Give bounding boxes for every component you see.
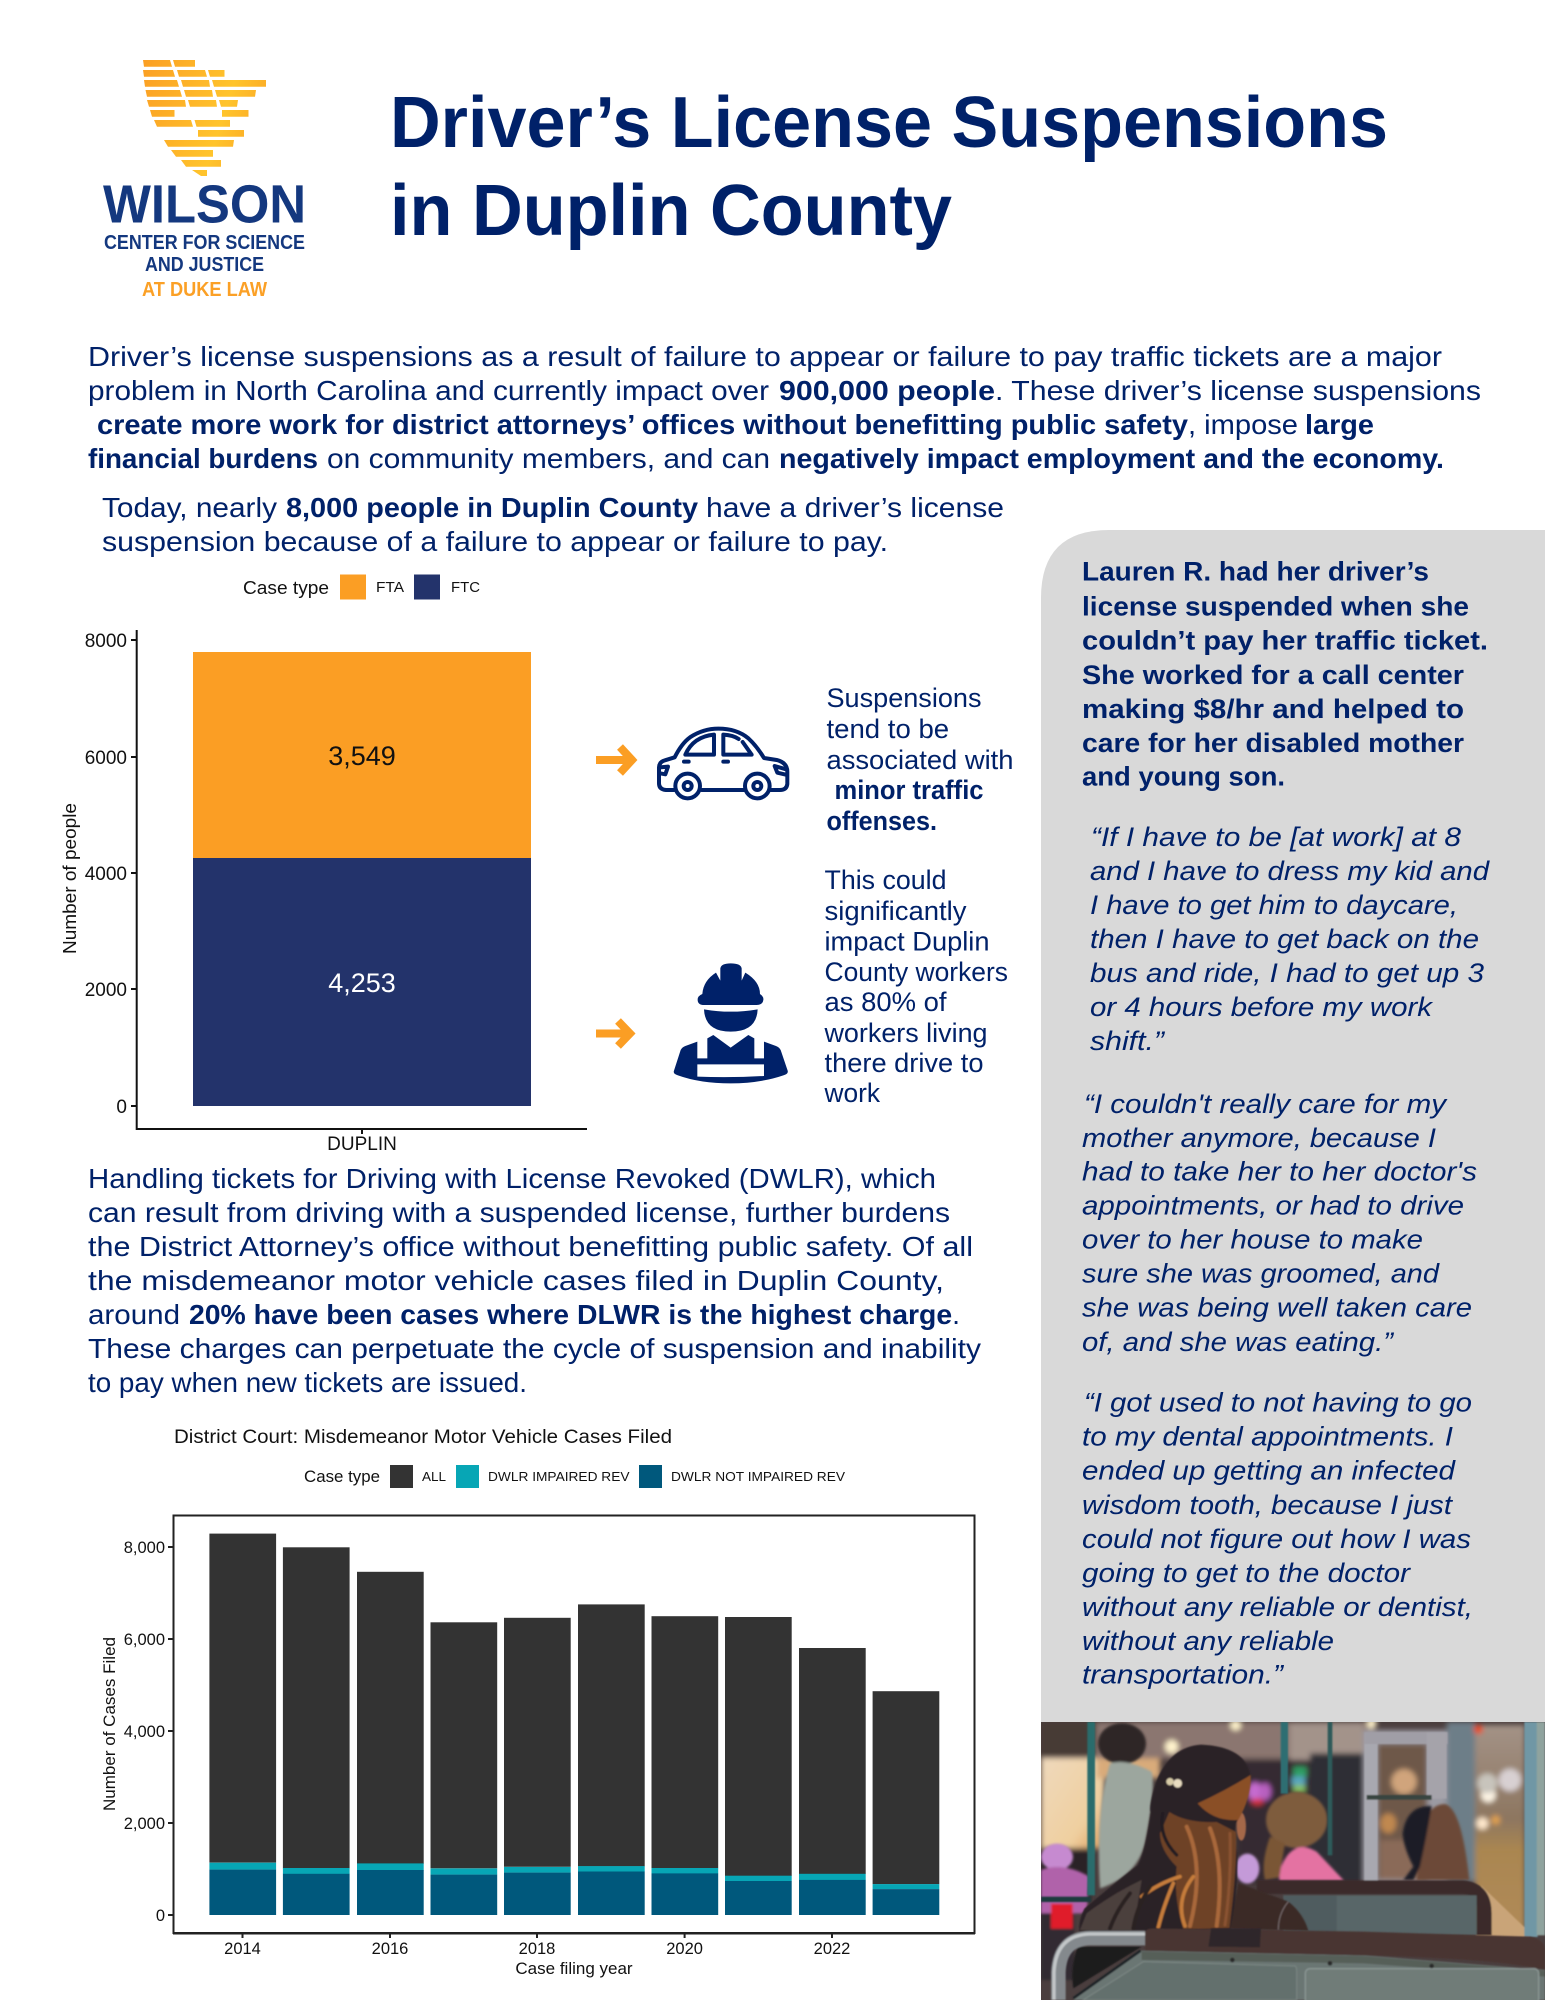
worker text	[824, 865, 1008, 1108]
logo wordmark	[103, 175, 306, 301]
quote 2: mother anymore, because I	[1082, 1123, 1437, 1153]
arrow to worker	[596, 1021, 630, 1046]
intro paragraph: create more work for district attorneys’ offices without benefitting public safety	[97, 409, 1188, 440]
x axis labels: 2020	[666, 1940, 703, 1958]
quote 1: I have to get him to daycare,	[1090, 890, 1458, 920]
y axis labels	[124, 1539, 165, 1925]
y axis labels: 8000	[85, 631, 127, 652]
intro paragraph: large	[1305, 409, 1374, 440]
quote 1: “If I have to be [at work] at 8	[1091, 822, 1461, 852]
y axis title: Number of Cases Filed	[100, 1637, 119, 1811]
DWLR paragraph: Handling tickets for Driving with License Revoked (DWLR), which	[88, 1163, 936, 1194]
worker text: This could	[824, 865, 946, 895]
DWLR not impaired bars	[209, 1870, 939, 1915]
car text	[826, 683, 1014, 836]
plot frame	[174, 1516, 974, 1933]
y axis labels: 4,000	[124, 1723, 165, 1741]
intro paragraph: 900,000 people	[779, 375, 995, 406]
legend: DWLR IMPAIRED REV	[488, 1469, 630, 1484]
story intro: and young son.	[1082, 762, 1285, 792]
story intro: Lauren R. had her driver’s	[1082, 556, 1429, 586]
logo mark	[143, 60, 266, 176]
quote 3: without any reliable or dentist,	[1082, 1592, 1473, 1622]
intro paragraph: problem in North Carolina and currently impact over	[88, 375, 769, 406]
x axis labels: 2022	[814, 1940, 850, 1958]
logo wordmark: AND JUSTICE	[145, 253, 264, 276]
y axis labels: 2000	[85, 980, 127, 1001]
logo: Wilson Center	[103, 60, 306, 301]
worker text: workers living	[824, 1018, 988, 1048]
quote 3: “I got used to not having to go	[1084, 1388, 1472, 1418]
x axis labels	[224, 1940, 850, 1958]
quote 3: wisdom tooth, because I just	[1082, 1490, 1454, 1520]
quote 2: over to her house to make	[1082, 1225, 1423, 1255]
quote 1: then I have to get back on the	[1090, 924, 1479, 954]
quote 1	[1090, 822, 1490, 1056]
quote 2: had to take her to her doctor's	[1082, 1156, 1477, 1186]
worker text: significantly	[824, 896, 967, 926]
quote 3: without any reliable	[1082, 1626, 1334, 1656]
title	[390, 83, 1388, 251]
DWLR paragraph: can result from driving with a suspended license, further burdens	[88, 1197, 950, 1228]
car text: tend to be	[826, 714, 949, 744]
intro paragraph: Driver’s license suspensions as a result of failure to appear or failure to pay traffic tickets are a major	[88, 341, 1442, 372]
title: Driver’s License Suspensions	[390, 83, 1388, 163]
Duplin County statement	[102, 492, 1004, 557]
DWLR paragraph: the District Attorney’s office without benefitting public safety. Of all	[88, 1231, 973, 1262]
FTC bar segment	[193, 858, 531, 1106]
quote 3: transportation.”	[1082, 1660, 1284, 1690]
intro paragraph: financial burdens	[88, 443, 318, 474]
front seat	[1054, 1928, 1545, 2000]
icon: car	[659, 729, 787, 798]
quote 1: shift.”	[1090, 1026, 1165, 1056]
FTA value: 3,549	[328, 741, 396, 771]
quote 3: could not figure out how I was	[1082, 1524, 1471, 1554]
y axis labels: 4000	[85, 864, 127, 885]
x axis labels: 2014	[224, 1940, 261, 1958]
intro paragraph: . These driver’s license suspensions	[995, 375, 1481, 406]
worker text: impact Duplin	[824, 926, 990, 956]
quote 2: sure she was groomed, and	[1082, 1259, 1440, 1289]
legend: FTA	[376, 579, 404, 596]
DWLR paragraph: around	[88, 1299, 180, 1330]
story intro: license suspended when she	[1082, 592, 1469, 622]
x axis labels: 2018	[519, 1940, 555, 1958]
x axis title: Case filing year	[515, 1959, 633, 1978]
quote 3: ended up getting an infected	[1082, 1456, 1456, 1486]
quote 2: “I couldn't really care for my	[1084, 1089, 1448, 1119]
panel background	[1041, 530, 1545, 1722]
y axis labels: 2,000	[124, 1815, 165, 1833]
y axis title: Number of people	[60, 803, 80, 954]
quote 3	[1082, 1388, 1473, 1690]
FTC value: 4,253	[328, 968, 396, 998]
DWLR paragraph	[88, 1163, 981, 1398]
bar chart: misdemeanor motor vehicle cases	[100, 1427, 975, 1978]
y axis labels: 0	[116, 1097, 127, 1118]
x axis labels: 2016	[372, 1940, 408, 1958]
legend: Case type	[243, 578, 329, 598]
legend: ALL	[422, 1469, 446, 1484]
FTA bar segment	[193, 652, 531, 858]
car text: Suspensions	[826, 683, 982, 713]
axis line and ticks	[168, 1547, 975, 1938]
arrow to car	[596, 747, 632, 773]
story intro: She worked for a call center	[1082, 660, 1464, 690]
legend: Case type	[304, 1467, 380, 1486]
DWLR paragraph: 20% have been cases where DLWR is the highest charge .	[189, 1299, 960, 1330]
intro paragraph: , impose	[1188, 409, 1298, 440]
y axis labels: 8,000	[124, 1539, 165, 1557]
Duplin County statement: have a driver’s license	[706, 492, 1004, 523]
logo wordmark: AT DUKE LAW	[142, 278, 268, 301]
legend: FTC	[451, 579, 480, 596]
intro paragraph	[88, 341, 1481, 474]
Duplin County statement: suspension because of a failure to appear or failure to pay.	[102, 526, 888, 557]
car text: offenses.	[826, 806, 937, 836]
legend: DWLR NOT IMPAIRED REV	[671, 1469, 845, 1484]
car text: associated with	[826, 745, 1014, 775]
x label: DUPLIN	[327, 1134, 397, 1155]
worker text: work	[824, 1078, 881, 1108]
seat behind	[1257, 1880, 1492, 1935]
Duplin County statement: Today, nearly	[102, 492, 277, 523]
intro paragraph: on community members, and can	[327, 443, 770, 474]
quote 1: and I have to dress my kid and	[1090, 856, 1490, 886]
logo wordmark: CENTER FOR SCIENCE	[104, 231, 305, 254]
legend	[304, 1465, 845, 1488]
Duplin County statement: 8,000 people in Duplin County	[286, 492, 698, 523]
DWLR paragraph: These charges can perpetuate the cycle of suspension and inability	[88, 1333, 981, 1364]
story intro: couldn’t pay her traffic ticket.	[1082, 626, 1488, 656]
quote 2: she was being well taken care	[1082, 1293, 1472, 1323]
quote 2	[1082, 1089, 1477, 1357]
y axis labels	[85, 631, 127, 1118]
story intro: care for her disabled mother	[1082, 728, 1464, 758]
worker text: there drive to	[824, 1048, 984, 1078]
photo: woman riding a bus	[1041, 1718, 1545, 2000]
y axis labels: 6,000	[124, 1631, 165, 1649]
axes	[131, 630, 587, 1134]
DWLR paragraph: the misdemeanor motor vehicle cases filed in Duplin County,	[88, 1265, 944, 1296]
quote 1: bus and ride, I had to get up 3	[1090, 958, 1484, 988]
story intro: making $8/hr and helped to	[1082, 694, 1464, 724]
all cases bars	[209, 1534, 939, 1884]
panel: Lauren R. story	[1041, 530, 1545, 1722]
DWLR paragraph: to pay when new tickets are issued.	[88, 1367, 527, 1398]
story intro	[1082, 556, 1488, 792]
quote 3: to my dental appointments. I	[1082, 1422, 1454, 1452]
title: in Duplin County	[390, 171, 952, 251]
quote 2: appointments, or had to drive	[1082, 1190, 1464, 1220]
car text: minor traffic	[834, 775, 984, 805]
logo wordmark: WILSON	[103, 175, 306, 235]
y axis labels: 6000	[85, 748, 127, 769]
quote 2: of, and she was eating.”	[1082, 1327, 1394, 1357]
intro paragraph: negatively impact employment and the economy.	[779, 443, 1444, 474]
y axis labels: 0	[156, 1907, 165, 1925]
worker text: County workers	[824, 957, 1008, 987]
bar chart: suspensions in Duplin	[60, 574, 587, 1155]
legend	[243, 574, 480, 600]
DWLR impaired bars	[209, 1863, 939, 1889]
chart title: District Court: Misdemeanor Motor Vehicle Cases Filed	[174, 1427, 672, 1448]
worker text: as 80% of	[824, 987, 947, 1017]
icon: construction worker	[674, 963, 788, 1083]
quote 3: going to get to the doctor	[1082, 1558, 1411, 1588]
quote 1: or 4 hours before my work	[1090, 992, 1434, 1022]
